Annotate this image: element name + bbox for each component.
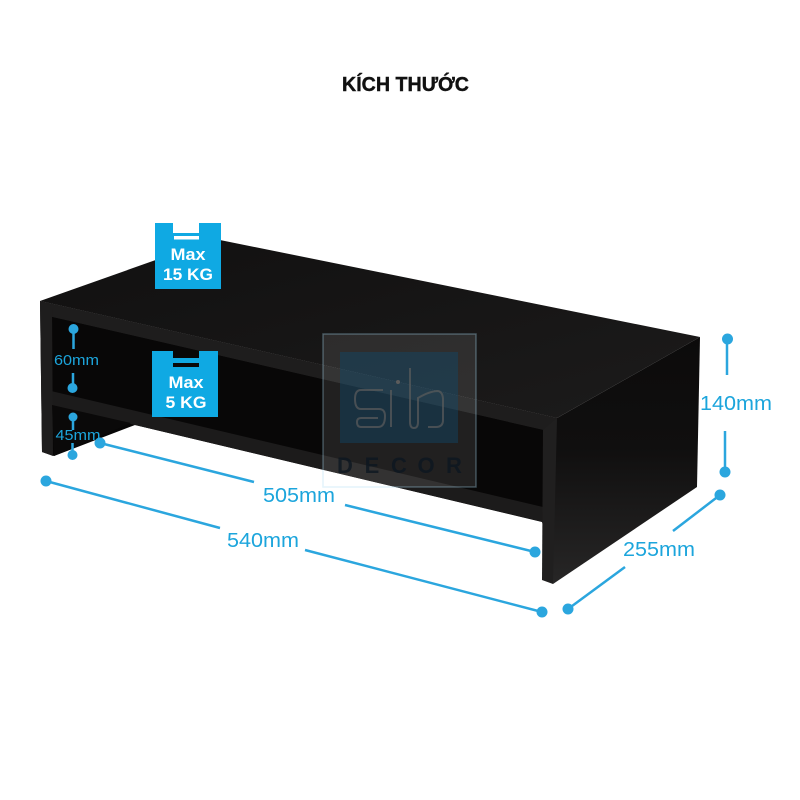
- badge: Max 5 KG: 5 KG: [166, 393, 206, 412]
- badge: Max 15 KG: Max: [170, 245, 206, 264]
- title: KÍCH THƯỚC: [342, 72, 469, 96]
- dimension: 140mm: [700, 334, 772, 478]
- dimension: 60mm: [54, 324, 99, 393]
- left leg: [40, 301, 53, 456]
- stand top surface: [40, 239, 700, 418]
- monitor stand: [40, 239, 700, 584]
- badge: Max 5 KG: [152, 351, 218, 417]
- dimension: 255mm: 255mm: [623, 539, 695, 561]
- dimension: 505mm: [94, 438, 540, 558]
- dimension: 540mm: 540mm: [227, 530, 299, 552]
- watermark: SIH decor: DECOR: [337, 453, 462, 478]
- dimension: 505mm: 505mm: [263, 485, 335, 507]
- badge: Max 5 KG: Max: [168, 373, 204, 392]
- right side panel: [553, 337, 700, 584]
- dimension: 140mm: 140mm: [700, 393, 772, 415]
- stand dark base: [40, 301, 557, 575]
- dimension: 45mm: [56, 412, 100, 460]
- badge: Max 15 KG: [155, 223, 221, 289]
- middle shelf board: [51, 391, 543, 522]
- dimension: 540mm: [40, 476, 548, 618]
- dimension: 255mm: [562, 490, 726, 614]
- upper shelf opening: [52, 317, 543, 508]
- right leg front: [542, 418, 557, 584]
- dimension: 60mm: 60mm: [54, 352, 99, 369]
- left side inner panel: [52, 405, 131, 456]
- badge: Max 15 KG: 15 KG: [163, 265, 213, 284]
- stand front top board: [40, 301, 557, 431]
- watermark: SIH decor: [323, 334, 476, 487]
- dimension: 45mm: 45mm: [56, 427, 100, 444]
